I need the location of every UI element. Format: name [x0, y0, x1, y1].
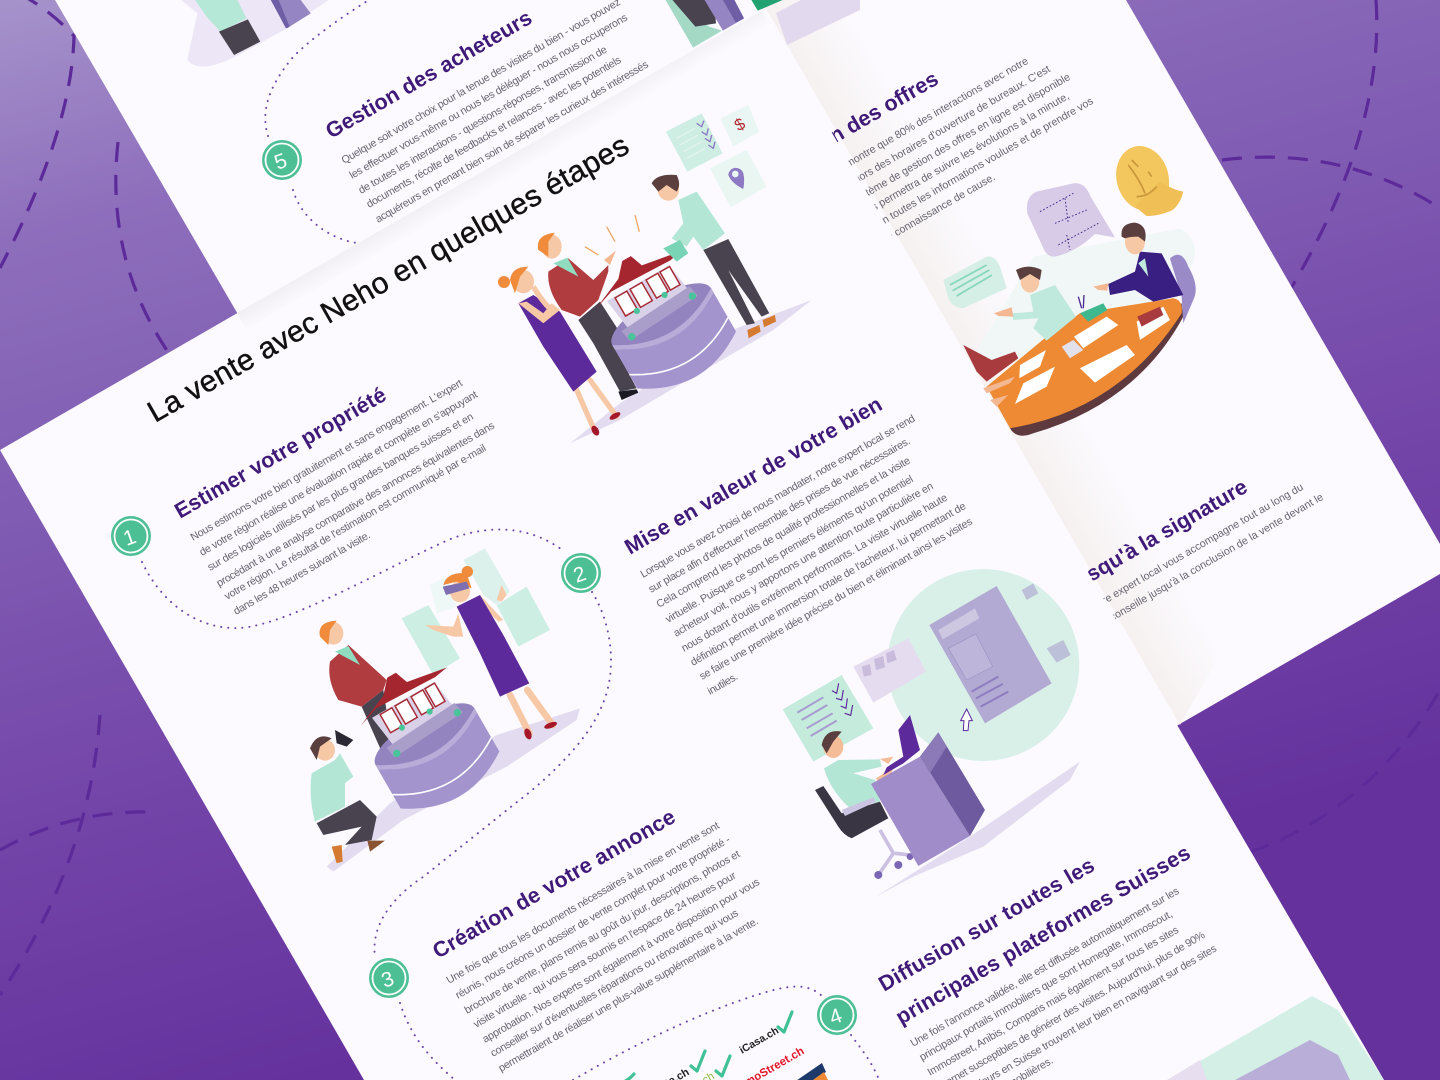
panel: dollar [721, 105, 759, 147]
text block: offres: et vous permettra de suivre les évolutions à la minute, [844, 90, 1072, 228]
step badge 3 [369, 958, 409, 998]
panel: dollar: $ [731, 114, 748, 135]
heading: création annonce: Création de votre annonce [428, 805, 680, 963]
text block: offres: agence se font hors des horaires d'ouverture de bureaux. C'est [788, 63, 1053, 223]
text block: création annonce: brochure de vente, plans remis au goût du jour, descriptions, photos et [462, 848, 742, 1017]
text block: mise en valeur: sur place afin d'effectuer l'ensemble des prises de vue nécessaires. [646, 435, 912, 596]
icon: gold coin [1109, 140, 1183, 217]
illustration: meeting table [943, 140, 1196, 436]
table [1010, 303, 1183, 436]
text block: diffusion: principaux portails immobiliers que sont Homegate, Immoscout, [918, 908, 1175, 1064]
text block: mise en valeur: inutiles. [706, 671, 740, 698]
step badge 2 [561, 553, 601, 593]
text block: signature: Notre expert local vous accompagne tout au long du [1085, 481, 1306, 615]
illustration: cropped landscape [1167, 996, 1384, 1080]
person: man writing [652, 175, 776, 338]
heading: diffusion: principales plateformes Suisses [892, 841, 1195, 1029]
speech bubble: formulas [1027, 183, 1115, 257]
chair [815, 786, 913, 879]
checklist card [783, 675, 873, 762]
person: man in mint shirt [994, 267, 1076, 341]
icon: cursor [961, 709, 972, 731]
text block: mise en valeur: Lorsque vous avez choisi de nous mandater, notre expert local se rend [638, 413, 917, 581]
ground shadow [327, 708, 580, 872]
illustration: cropped figures left [181, 0, 328, 66]
browser window [929, 583, 1071, 723]
text block: diffusion: Immostreet, Anibis, Comparis mais également sur tous les sites [926, 924, 1181, 1079]
text block: création annonce: visite virtuelle - qui vous sera soumis en l'espace de 24 heures pour [472, 869, 739, 1031]
text block: estimer: sur des logiciels utilisés par les plus grandes banques suisses et en [206, 411, 476, 574]
illustration: cropped figures centre [666, 0, 783, 48]
person: man in suit [1093, 223, 1183, 302]
portal logos with check marks [624, 1012, 828, 1080]
person: woman in dress [498, 267, 622, 437]
text block: création annonce: permettraient de réaliser une plus-value supplémentaire à la vente. [496, 915, 761, 1075]
person: woman with VR headset [425, 566, 558, 740]
text block: création annonce [444, 820, 762, 1075]
panel: right sheet [700, 0, 1440, 770]
heading: jusqu'à la signature: Accompagnement jusqu'à la signature [899, 475, 1252, 692]
logo: blue and orange [790, 1063, 828, 1080]
text block: offres: pourquoi notre système de gestion des offres en ligne est disponible [787, 71, 1073, 243]
step badge 5: 5 [271, 149, 290, 175]
icon: house model [582, 233, 708, 349]
logo: iCasa: iCasa.ch [738, 1025, 781, 1057]
text block: offres: L'expérience montre que 80% des interactions avec notre [789, 55, 1031, 202]
lavender card [853, 638, 926, 703]
pedestal [602, 271, 746, 405]
text block: estimer: dans les 48 heures suivant la visite. [232, 529, 373, 618]
person: man at desk [822, 731, 894, 816]
step badge 1: 1 [120, 525, 139, 551]
text block: acheteurs: Quelque soit votre choix pour la tenue des visites du bien - vous pouvez [340, 0, 623, 167]
text block: estimer [188, 377, 497, 618]
ground shadow [876, 762, 1080, 897]
text block: mise en valeur: nous dotant d'outils extrêment performants. La visite virtuelle haute [680, 492, 950, 655]
icon: house model [347, 649, 473, 765]
step badge 1 [111, 516, 151, 556]
text block: estimer: de votre région réalise une évaluation rapide et complète en s'appuyant [198, 389, 480, 559]
text block: création annonce: Une fois que tous les documents nécessaires à la mise en vente sont [444, 820, 722, 987]
person: woman left cropped [963, 345, 1018, 407]
text block: acheteurs: documents, récolte de feedbacks et relances - avec les potentiels [364, 54, 623, 211]
text block: estimer: Nous estimons votre bien gratuitement et sans engagement. L'expert [188, 377, 465, 544]
illustration: estimation scene [498, 105, 812, 443]
text block: offres: décisions en toute connaissance de cause. [815, 171, 998, 283]
heading: mise en valeur: Mise en valeur de votre bien [620, 392, 886, 559]
step badge 4 [817, 995, 857, 1035]
illustration: online listing scene [783, 569, 1080, 897]
desk [871, 732, 985, 866]
text block: mise en valeur: virtuelle. Puisque ce sont les premiers éléments qu'un potentiel [664, 473, 915, 626]
speech bubble: mint [943, 256, 1007, 308]
text block: création annonce: réunis, nous créons un dossier de vente complet pour votre propriété - [454, 833, 733, 1002]
step badge 4: 4 [826, 1004, 845, 1030]
illustration fragment: top of right sheet [776, 0, 860, 45]
title: La vente avec Neho en quelques étapes [142, 129, 634, 429]
text block: création annonce: approbation. Nos experts sont également à votre disposition pour vous [480, 876, 762, 1046]
text block: mise en valeur: définition permet une immersion totale de l'acheteur, lui permettant de [688, 500, 968, 669]
laptop [883, 715, 920, 775]
text block: création annonce: conseiller sur d'éventuelles réparations ou rénovations qui vous [488, 907, 740, 1060]
text block: signature: processus et puis conseille jusqu'à la conclusion de la vente devant le [1033, 491, 1326, 667]
text block: estimer: votre région. Le résultat de l'estimation est communiqué par e-mail [222, 442, 488, 603]
dotted path: steps connector [142, 0, 880, 1080]
person: photographer [310, 730, 385, 863]
text block: mise en valeur: se faire une première idée précise du bien et éliminant ainsi les visites [698, 516, 975, 683]
step badge 2: 2 [570, 562, 589, 588]
chair [1170, 255, 1196, 323]
text block: mise en valeur [638, 413, 975, 698]
ground shadow [570, 300, 812, 443]
step badge 3: 3 [378, 967, 397, 993]
heading: gestion des acheteurs: Gestion des acheteurs [322, 6, 536, 143]
mint panels [402, 548, 550, 675]
heading: gestion des offres: Gestion des offres [767, 67, 943, 182]
person: man in red sweater [538, 233, 638, 400]
panel: upper sheet [55, 0, 783, 335]
pedestal [366, 691, 509, 825]
heading: diffusion: Diffusion sur toutes les [874, 853, 1099, 996]
panel: location pin [710, 150, 767, 207]
text block: offres: d'évaluation toutes les informations voulues et de prendre vos [836, 95, 1096, 252]
text block: offres [787, 55, 1096, 283]
heading: estimer: Estimer votre propriété [170, 383, 390, 523]
papers and books [1015, 295, 1170, 404]
text block: acheteurs: les effectuer vous-même ou nous les déléguer - nous nous occuperons [348, 12, 630, 182]
panel: checklist [666, 113, 723, 172]
illustration: visit scene [310, 548, 580, 872]
text block: mise en valeur: acheteur voit, nous y apportons une attention toute particulière en [672, 480, 936, 640]
spark lines [585, 215, 639, 255]
text block: estimer: procédant à une analyse comparative des annonces équivalentes dans [214, 420, 497, 590]
step badge 5 [262, 140, 302, 180]
mint circle [887, 569, 1079, 761]
text block: diffusion: Une fois l'annonce validée, elle est diffusée automatiquement sur les [908, 885, 1181, 1050]
check marks [778, 1012, 792, 1032]
text block: acheteurs [340, 0, 651, 226]
text block: mise en valeur: Cela comprend les photos de qualité professionnelles et la visite [654, 455, 913, 611]
person: man in red sweater [320, 621, 392, 752]
text block: acheteurs: de toutes les interactions - questions-réponses, transmission de [356, 44, 609, 197]
text block: acheteurs: acquéreurs en prenant bien soin de séparer les curieux des intéressés [374, 59, 651, 226]
